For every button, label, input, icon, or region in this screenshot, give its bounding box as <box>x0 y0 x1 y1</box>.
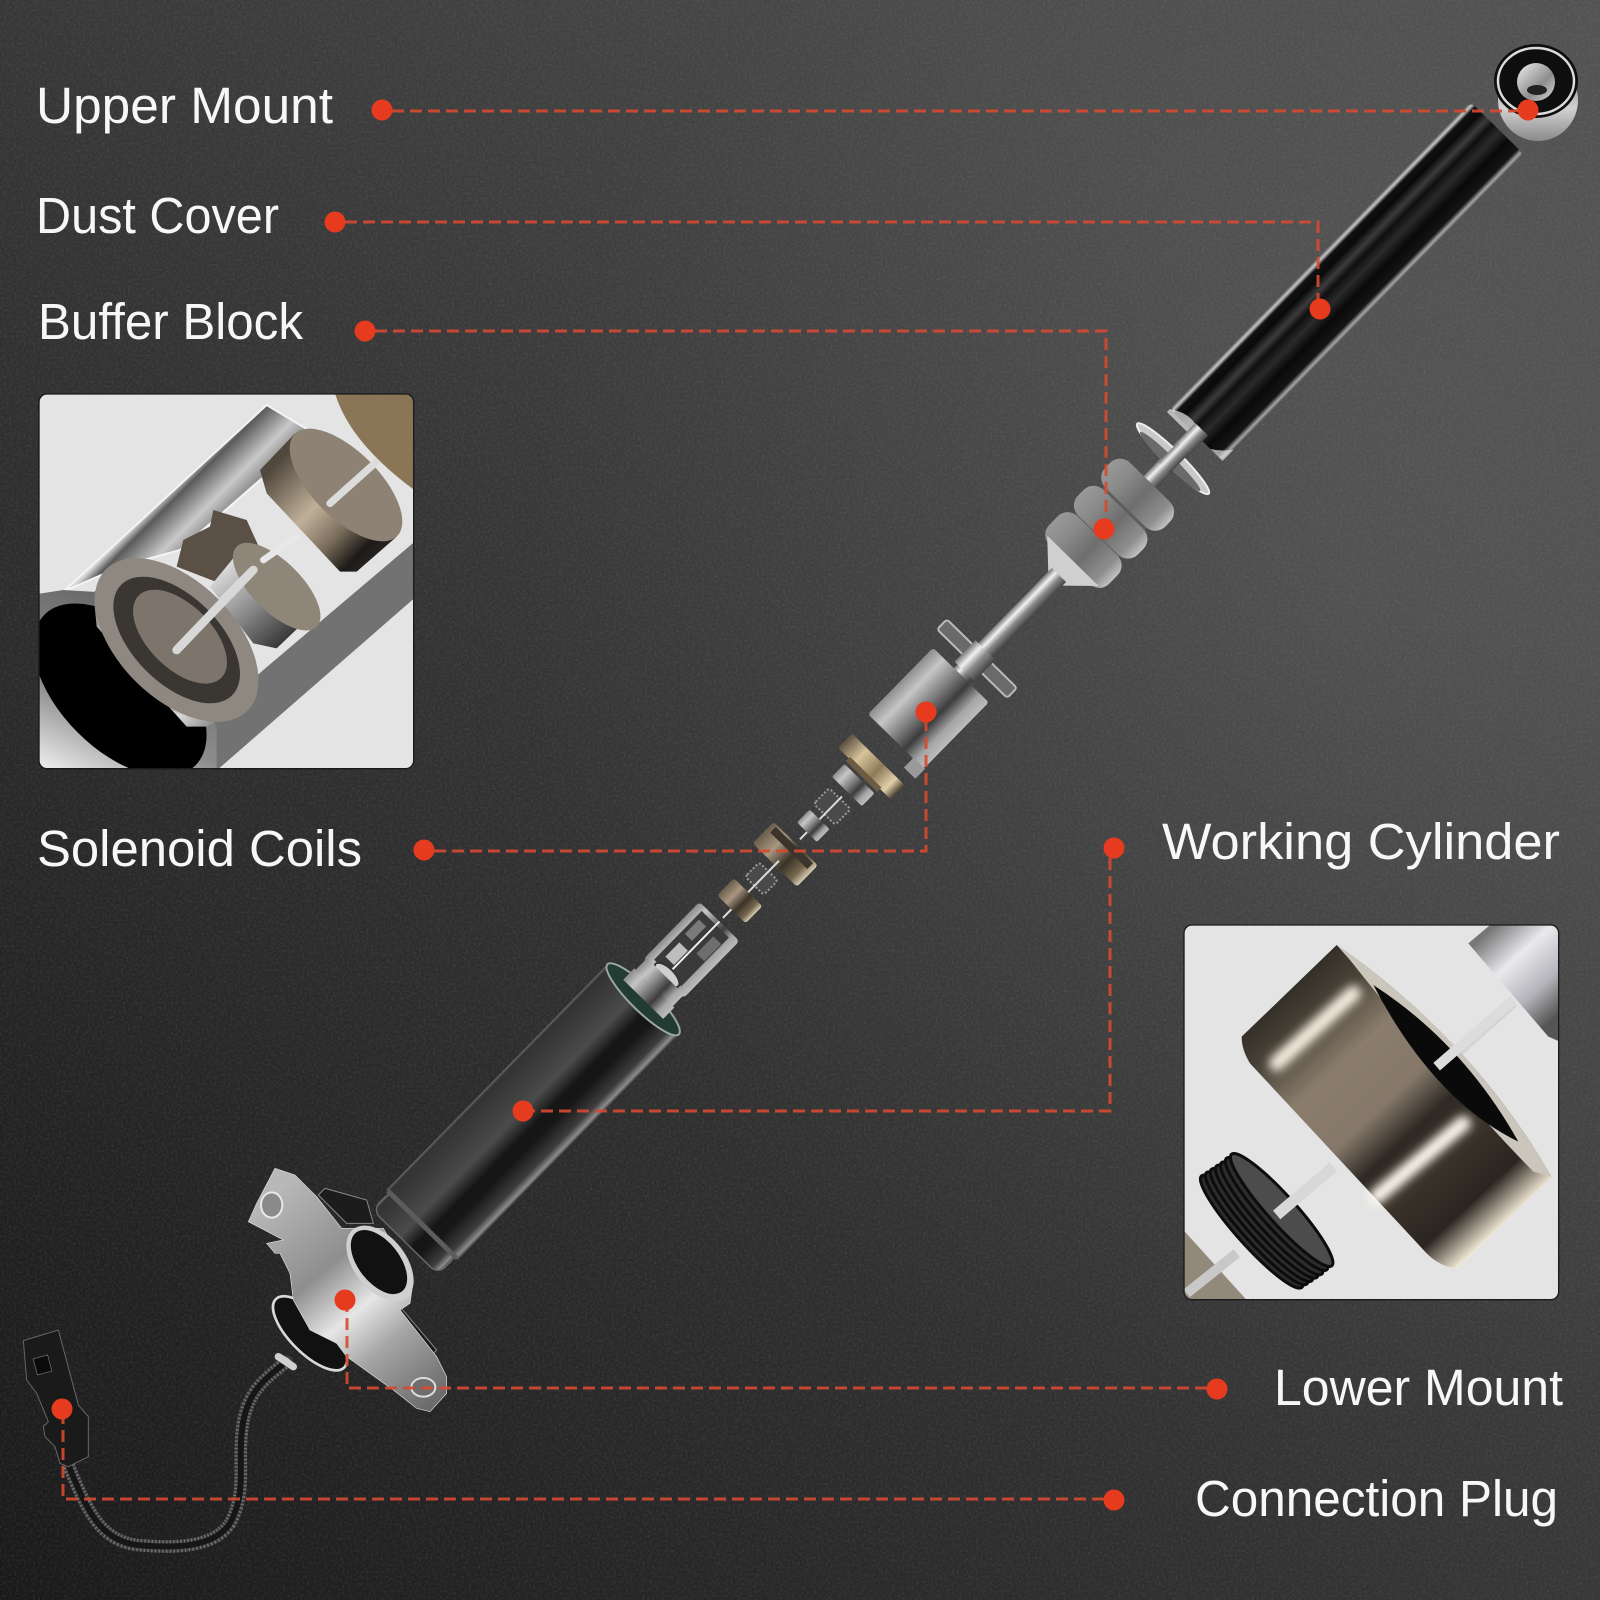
dust cover tube <box>1167 102 1523 464</box>
lower dust washer and rod <box>1114 394 1237 517</box>
top silver part <box>1468 925 1560 1042</box>
silver neck <box>625 958 684 1018</box>
solenoid cylinder <box>859 648 990 779</box>
black spring <box>1198 1152 1334 1290</box>
upper piston disc <box>260 428 402 572</box>
small silver cap <box>797 810 830 842</box>
gold disc <box>835 733 905 802</box>
rod washer <box>929 616 1020 706</box>
label: dust cover: Dust Cover <box>36 187 279 244</box>
lower mount bracket <box>248 1168 447 1412</box>
lower rod <box>1187 1253 1237 1293</box>
small brown block <box>717 878 762 923</box>
leader: working cylinder <box>512 838 1124 1122</box>
lower cylinder wall <box>214 543 413 768</box>
middle rod <box>1277 1167 1333 1215</box>
top right brown part <box>335 393 417 492</box>
label: buffer block: Buffer Block <box>38 293 303 350</box>
small spring lower <box>714 852 788 927</box>
connection plug <box>23 1330 88 1467</box>
beige corner <box>1183 1230 1247 1300</box>
label: connection plug: Connection Plug <box>1195 1470 1558 1527</box>
tube end with opening <box>40 590 217 768</box>
valve cage <box>642 902 739 1000</box>
large brown coil block <box>753 822 818 887</box>
label: working cylinder: Working Cylinder <box>1162 813 1560 870</box>
inset panel: coil detail <box>1183 925 1560 1300</box>
label: upper mount: Upper Mount <box>36 77 333 134</box>
front seal ring <box>94 557 258 727</box>
small silver block <box>832 764 874 806</box>
brown bracket <box>177 510 263 583</box>
connection cable <box>68 1357 293 1547</box>
piston rods <box>218 462 376 600</box>
leader: solenoid coils <box>414 702 936 860</box>
leader: dust cover <box>324 212 1330 320</box>
brown cylinder <box>1242 945 1552 1268</box>
label: lower mount: Lower Mount <box>1274 1359 1563 1416</box>
leader: lower mount <box>334 1290 1228 1400</box>
label: solenoid coils: Solenoid Coils <box>37 820 362 877</box>
leader: connection plug <box>52 1398 1124 1510</box>
leader: upper mount <box>372 100 1538 120</box>
shock absorber exploded assembly <box>369 93 1533 1277</box>
small spring upper <box>789 786 853 850</box>
upper mount bearing <box>1494 44 1578 141</box>
upper rod <box>1461 1004 1517 1054</box>
inset panel: valve detail <box>38 393 414 770</box>
upper cylinder wall <box>63 405 317 592</box>
working cylinder <box>369 953 690 1277</box>
lower piston disc <box>210 542 320 648</box>
leader: buffer block <box>354 320 1114 540</box>
piston rod <box>954 568 1066 682</box>
buffer block <box>1025 453 1180 608</box>
